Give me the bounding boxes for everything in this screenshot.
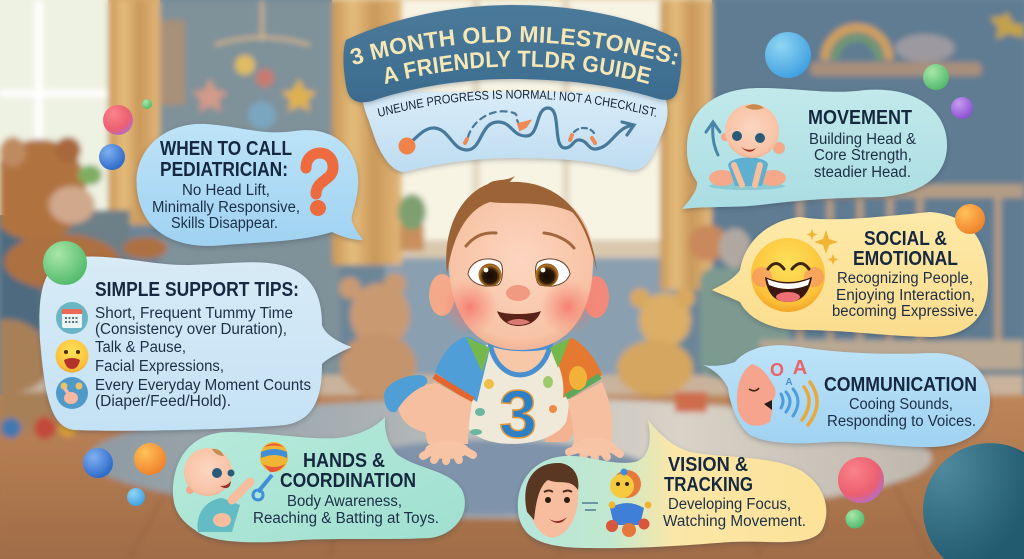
icon: parent face [525, 463, 578, 538]
back leg and sock [398, 384, 470, 435]
body text: Core Strength, [814, 147, 912, 164]
right hand [569, 438, 620, 458]
body text: Every Everyday Moment Counts [95, 377, 311, 394]
panel: simple support tips [39, 241, 352, 431]
floating balls [83, 32, 973, 528]
icon: question mark [306, 153, 333, 216]
onesie spots [484, 379, 494, 389]
icon: cooing face and sound waves: O [770, 360, 784, 380]
title banner [341, 4, 684, 176]
title ribbon [343, 5, 681, 102]
icon: up arrow [706, 122, 720, 155]
mobile [215, 0, 310, 45]
cheeks [442, 279, 498, 335]
icon: cooing face and sound waves: A [785, 377, 793, 388]
body text [152, 182, 300, 232]
left sleeve [435, 337, 490, 402]
body text: Cooing Sounds, [849, 396, 953, 413]
onesie [462, 342, 569, 444]
body text: Responding to Voices. [827, 413, 976, 430]
ears [429, 274, 455, 316]
right sleeve [550, 338, 602, 398]
panel: communication [703, 345, 990, 447]
panel: vision and tracking [518, 420, 826, 548]
panel: social and emotional: EMOTIONAL [853, 248, 958, 270]
body text: Skills Disappear. [171, 215, 278, 232]
body text: Recognizing People, [837, 270, 973, 287]
right arm [568, 382, 613, 444]
head [449, 190, 593, 350]
heading: WHEN TO CALL [160, 138, 292, 160]
body text: Body Awareness, [287, 493, 402, 510]
body text: Enjoying Interaction, [836, 287, 975, 304]
body text: Reaching & Batting at Toys. [253, 510, 439, 527]
left hand [423, 441, 473, 461]
number 3: 3 [499, 376, 537, 452]
body text: Facial Expressions, [95, 358, 224, 375]
body text [827, 396, 976, 430]
body text: Short, Frequent Tummy Time [95, 305, 293, 322]
body text: Minimally Responsive, [152, 199, 300, 216]
big blurred ball, bottom right [923, 443, 1024, 559]
body text [253, 493, 439, 527]
icon: cooing face and sound waves: A [793, 357, 807, 379]
body text: Developing Focus, [668, 496, 791, 513]
icon: orange ball [955, 204, 985, 234]
panel: when to call pediatrician [136, 124, 363, 246]
panel: movement [682, 88, 947, 209]
eyes [468, 259, 502, 286]
body text: (Diaper/Feed/Hold). [95, 393, 231, 410]
panel: when to call pediatrician: PEDIATRICIAN: [160, 159, 288, 181]
mouth [497, 311, 541, 326]
title text: 3 MONTH OLD MILESTONES: [350, 26, 678, 65]
eyebrows [466, 233, 574, 248]
hair [446, 176, 597, 274]
heading: SIMPLE SUPPORT TIPS: [95, 279, 299, 301]
icon: calendar [56, 302, 88, 334]
icon: smiling emoji [751, 229, 838, 312]
subtitle panel [362, 92, 667, 172]
heading: SOCIAL & [864, 228, 947, 250]
body text [95, 305, 311, 410]
icon: baby with rattle [184, 442, 288, 532]
heading: COMMUNICATION [824, 374, 977, 396]
body text [663, 496, 806, 530]
body text: steadier Head. [814, 164, 911, 181]
body text: No Head Lift, [182, 182, 270, 199]
nose [506, 285, 530, 301]
rattle [258, 475, 272, 492]
icon: green ball [43, 241, 87, 285]
left arm [425, 382, 472, 444]
icon: cooing face and sound waves [737, 357, 817, 426]
body text [809, 131, 917, 181]
panel: vision and tracking: TRACKING [664, 474, 753, 496]
chart: uneven progress squiggle [398, 108, 634, 154]
body text: Building Head & [809, 131, 917, 148]
central baby [384, 176, 620, 461]
icon: baby on tummy [709, 104, 786, 190]
icon: sparkles [806, 229, 838, 265]
onesie collar [490, 343, 550, 375]
panel: social and emotional [712, 204, 988, 337]
heading: MOVEMENT [808, 107, 912, 129]
panel: hands and coordination: COORDINATION [280, 470, 416, 492]
icon: surprised face [56, 340, 88, 372]
icon: dash motion lines [582, 503, 598, 510]
body text: Watching Movement. [663, 513, 806, 530]
panel: hands and coordination [173, 417, 465, 542]
heading: HANDS & [303, 450, 385, 472]
stuffed bears and sofa [0, 215, 40, 330]
icon: toy robot on wheels [606, 468, 652, 537]
heading: VISION & [668, 454, 748, 476]
body text: becoming Expressive. [832, 303, 978, 320]
title text line 2: A FRIENDLY TLDR GUIDE [385, 50, 652, 84]
body text: Talk & Pause, [95, 339, 186, 356]
body text: (Consistency over Duration), [95, 321, 287, 338]
icon: hand [56, 377, 88, 409]
subtitle: UNEUNE PROGRESS IS NORMAL! NOT A CHECKLIST. [378, 90, 656, 117]
body text [832, 270, 978, 320]
